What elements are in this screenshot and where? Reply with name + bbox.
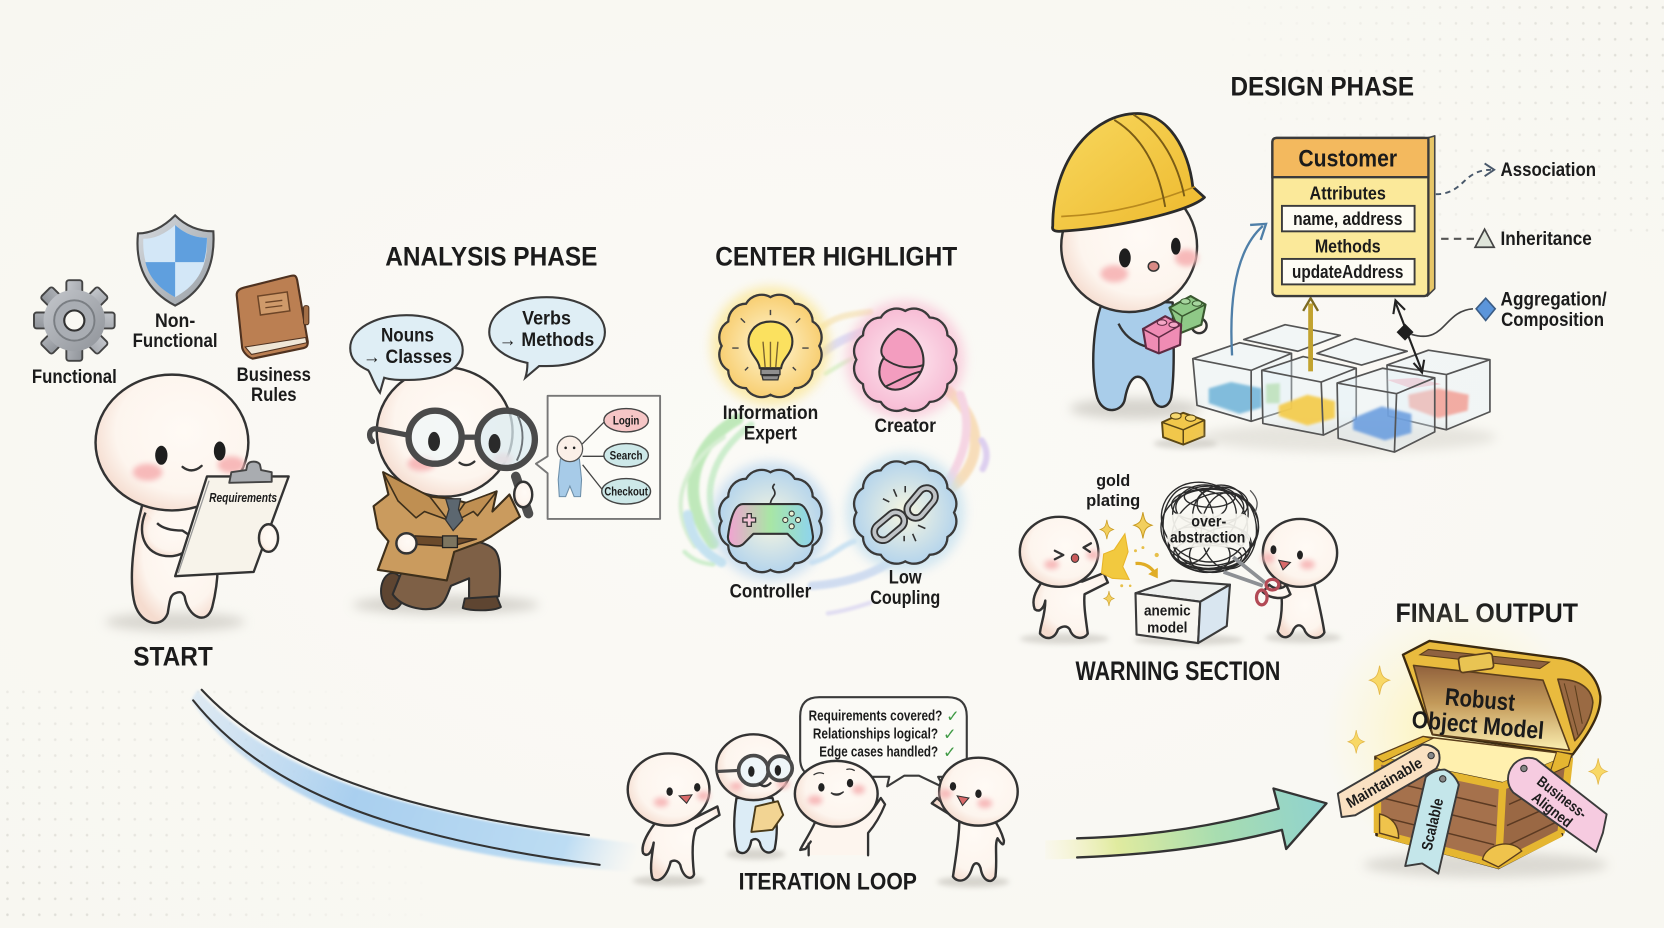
label: Business Rules: Rules bbox=[251, 385, 297, 406]
tag: Business-Aligned bbox=[1500, 750, 1618, 855]
badge: creator bbox=[846, 300, 965, 419]
label: Business Rules: Business bbox=[237, 365, 311, 386]
label: Non-Functional: Non- bbox=[155, 311, 195, 332]
arrow: blue, bricks to class bbox=[1231, 224, 1266, 355]
icon: gear, functional requirement bbox=[34, 280, 115, 361]
label: Information Expert: Information bbox=[723, 403, 818, 424]
character: detective with magnifier bbox=[352, 367, 539, 614]
panel: use case diagram: Checkout bbox=[604, 486, 648, 499]
character: iteration figure 4 bbox=[932, 758, 1018, 887]
icon: over-abstraction scribble: abstraction bbox=[1170, 529, 1245, 546]
label: Functional: Functional bbox=[32, 367, 117, 388]
box: blue bricks bbox=[1193, 343, 1291, 421]
label: Controller: Controller bbox=[730, 581, 812, 602]
panel: use case diagram bbox=[536, 396, 660, 519]
arrow: blue ribbon from start to iteration bbox=[191, 690, 637, 872]
tag: Scalable bbox=[1405, 766, 1461, 874]
label: Low Coupling: Coupling bbox=[870, 588, 940, 609]
icon: over-abstraction scribble: over- bbox=[1191, 513, 1226, 530]
heading: WARNING SECTION: WARNING SECTION bbox=[1076, 656, 1280, 686]
icon: shield, non-functional requirement bbox=[137, 215, 214, 306]
box: red bricks bbox=[1387, 350, 1490, 430]
tag: Scalable: Scalable bbox=[1419, 796, 1447, 852]
badge: controller bbox=[711, 462, 830, 580]
class card: Customer: name, address bbox=[1293, 209, 1402, 229]
speech bubble: verbs to methods: Verbs bbox=[522, 309, 571, 330]
legend: association: Association bbox=[1501, 160, 1596, 181]
panel: use case diagram: Login bbox=[613, 414, 639, 427]
class card: Customer: updateAddress bbox=[1292, 262, 1403, 282]
speech bubble: review checklist: ✓ bbox=[943, 743, 956, 762]
character: left figure with gold plating bbox=[1020, 517, 1109, 644]
character: right figure with scissors bbox=[1224, 519, 1341, 643]
character: iteration figure 1 bbox=[628, 753, 720, 886]
label: Non-Functional: Functional bbox=[133, 331, 218, 352]
class card: Customer: Customer bbox=[1298, 146, 1398, 173]
tag: Business-Aligned: Business- bbox=[1533, 774, 1589, 822]
icon: anemic model box: model bbox=[1147, 620, 1187, 636]
character: start figure with clipboard: Requirements bbox=[209, 490, 277, 505]
icon: treasure chest bbox=[1323, 600, 1608, 878]
heading: ITERATION LOOP: ITERATION LOOP bbox=[739, 868, 917, 895]
legend: aggregation and composition: Composition bbox=[1501, 310, 1604, 331]
heading: START: START bbox=[133, 641, 213, 671]
speech bubble: nouns to classes bbox=[350, 315, 463, 393]
box: yellow bricks bbox=[1262, 357, 1356, 435]
icon: over-abstraction scribble bbox=[1147, 467, 1271, 582]
speech bubble: verbs to methods: → Methods bbox=[499, 330, 594, 351]
tag: Maintainable: Maintainable bbox=[1344, 755, 1426, 812]
label: Robust Object Model: Object Model bbox=[1411, 707, 1545, 745]
heading: ANALYSIS PHASE: ANALYSIS PHASE bbox=[385, 241, 597, 271]
panel: use case diagram: Search bbox=[610, 449, 643, 462]
class card: Customer bbox=[1272, 136, 1435, 296]
label: gold plating: gold bbox=[1096, 471, 1130, 490]
label: Information Expert: Expert bbox=[744, 423, 798, 444]
label: Information Expert bbox=[723, 403, 818, 444]
icon: brown book, business rules bbox=[237, 276, 309, 359]
character: reviewer with glasses and notepad bbox=[716, 734, 792, 860]
tag: Maintainable bbox=[1330, 739, 1445, 822]
speech bubble: review checklist: Requirements covered? bbox=[809, 709, 942, 725]
speech bubble: review checklist: Relationships logical? bbox=[813, 727, 938, 743]
label: gold plating bbox=[1086, 471, 1140, 510]
heading: CENTER HIGHLIGHT: CENTER HIGHLIGHT bbox=[715, 241, 957, 271]
icon: anemic model box: anemic bbox=[1144, 603, 1191, 619]
legend: inheritance: Inheritance bbox=[1501, 229, 1592, 250]
speech bubble: verbs to methods bbox=[489, 297, 605, 378]
label: Low Coupling: Low bbox=[889, 568, 922, 589]
label: gold plating: plating bbox=[1086, 491, 1140, 510]
speech bubble: review checklist: ✓ bbox=[943, 725, 956, 744]
arrow: yellow, bricks to class bbox=[1303, 298, 1318, 371]
speech bubble: review checklist: ✓ bbox=[946, 707, 960, 726]
icon: gold sparks and sparkles bbox=[1100, 512, 1159, 606]
box: blue bricks front bbox=[1337, 368, 1435, 452]
chart: transparent class boxes with bricks bbox=[1193, 325, 1496, 452]
character: iteration figure 3 bbox=[795, 761, 885, 855]
class card: Customer: Methods bbox=[1315, 237, 1381, 257]
arrow: green ribbon to final output bbox=[1045, 788, 1327, 860]
label: Robust Object Model bbox=[1411, 684, 1545, 745]
tag: Business-Aligned: Aligned bbox=[1528, 790, 1575, 831]
sparkles around chest bbox=[1348, 666, 1607, 785]
badge: low coupling bbox=[846, 453, 965, 572]
icon: yellow brick bbox=[1154, 413, 1217, 449]
speech bubble: nouns to classes: → Classes bbox=[363, 347, 452, 368]
legend: association bbox=[1436, 160, 1596, 194]
character: start figure with clipboard bbox=[96, 375, 289, 631]
label: Non-Functional bbox=[133, 311, 218, 352]
legend: aggregation and composition: Aggregation/ bbox=[1501, 290, 1607, 311]
speech bubble: review checklist: Edge cases handled? bbox=[819, 745, 938, 761]
legend: aggregation and composition bbox=[1393, 290, 1607, 372]
badge: information expert bbox=[711, 287, 830, 405]
speech bubble: review checklist bbox=[800, 697, 967, 787]
character: builder with hard hat bbox=[1053, 114, 1207, 419]
icon: anemic model box bbox=[1133, 580, 1244, 645]
decoration: rainbow swirl bbox=[681, 312, 987, 613]
legend: inheritance bbox=[1441, 229, 1592, 250]
class card: Customer: Attributes bbox=[1310, 184, 1386, 204]
label: Creator: Creator bbox=[874, 416, 937, 437]
label: Low Coupling bbox=[870, 568, 940, 609]
label: Robust Object Model: Robust bbox=[1444, 684, 1516, 717]
speech bubble: nouns to classes: Nouns bbox=[381, 326, 434, 347]
label: Business Rules bbox=[237, 365, 311, 406]
heading: DESIGN PHASE: DESIGN PHASE bbox=[1230, 72, 1414, 102]
heading: FINAL OUTPUT: FINAL OUTPUT bbox=[1395, 598, 1578, 628]
